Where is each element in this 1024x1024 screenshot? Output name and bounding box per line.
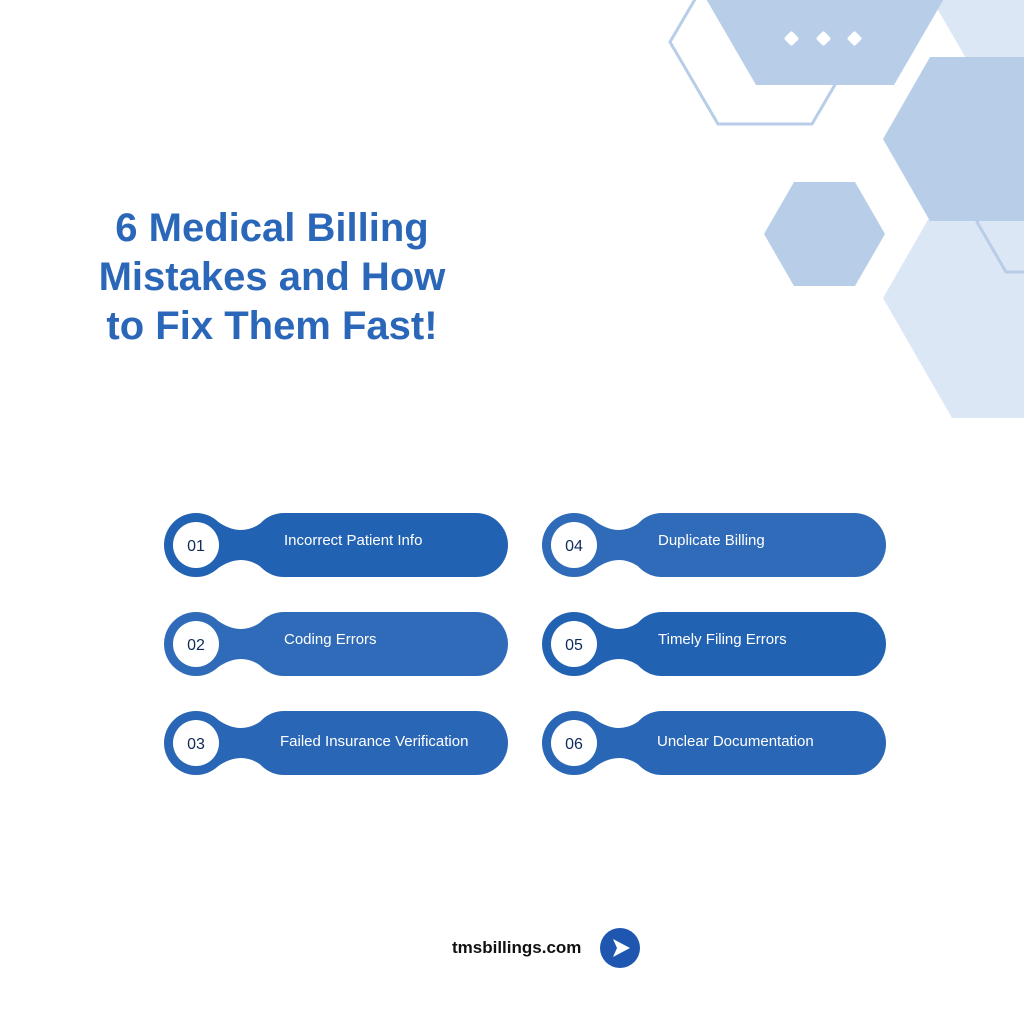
list item 03: 03 (187, 736, 205, 753)
decorative hexagon cluster (670, 0, 1024, 418)
icon: arrow button (600, 928, 640, 968)
list item 06: Unclear Documentation (657, 733, 814, 750)
list item 04: 04 (565, 538, 583, 555)
footer website: tmsbillings.com (452, 938, 581, 957)
list item 02 (164, 612, 508, 676)
list item 01: Incorrect Patient Info (284, 532, 422, 549)
list item 04: Duplicate Billing (658, 532, 765, 549)
title: Mistakes and How (99, 255, 446, 299)
list item 06 (542, 711, 886, 775)
list item 03 (164, 711, 508, 775)
list item 05: Timely Filing Errors (658, 631, 787, 648)
list item 06: 06 (565, 736, 583, 753)
list item 03: Failed Insurance Verification (280, 733, 468, 750)
list item 01 (164, 513, 508, 577)
list item 04 (542, 513, 886, 577)
list item 05: 05 (565, 637, 583, 654)
title: 6 Medical Billing (115, 206, 429, 250)
list item 05 (542, 612, 886, 676)
list item 02: 02 (187, 637, 205, 654)
title: to Fix Them Fast! (106, 304, 438, 348)
list item 02: Coding Errors (284, 631, 377, 648)
title (99, 206, 446, 348)
list item 01: 01 (187, 538, 205, 555)
icon: three dots (784, 31, 862, 46)
